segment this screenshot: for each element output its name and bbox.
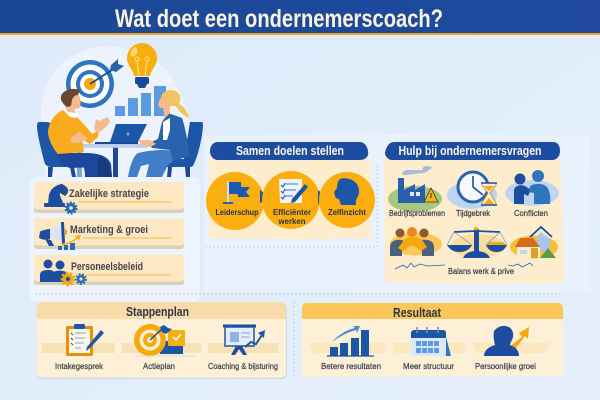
step: Actieplan <box>134 324 195 371</box>
man in yellow sweater <box>48 89 112 177</box>
illustration: coach meeting <box>37 43 203 177</box>
icon: people and gears <box>40 260 86 285</box>
goal: Efficiënter werken: werken <box>278 216 306 226</box>
icon: scales <box>447 227 507 258</box>
label: Bedrijfsproblemen <box>389 208 445 218</box>
step: Intakegesprek <box>55 324 104 371</box>
goal: Zelfinzicht <box>319 172 375 228</box>
result: Meer structuur <box>403 327 454 371</box>
panel: Samen doelen stellen <box>206 142 375 239</box>
heading: Resultaat <box>393 306 442 320</box>
decoration: squiggle lines <box>395 263 533 269</box>
title: Wat doet een ondernemerscoach? <box>115 5 443 33</box>
icon: conflict <box>505 170 559 206</box>
card: Personeelsbeleid <box>34 255 184 285</box>
icon: clock and hourglass <box>447 172 497 209</box>
header bar <box>0 0 600 35</box>
panel: expertise list <box>34 182 184 285</box>
heading pill <box>385 142 560 160</box>
heading pill: Hulp bij ondernemersvragen <box>398 144 542 158</box>
label: Conflicten <box>514 208 548 218</box>
chart: rising bars <box>115 86 166 116</box>
panel: Hulp bij ondernemersvragen <box>384 142 565 284</box>
heading pill: Samen doelen stellen <box>236 144 344 158</box>
woman in blue blazer <box>128 90 190 177</box>
heading: Stappenplan <box>126 305 189 319</box>
arrow <box>260 190 270 203</box>
step: Intakegesprek: Intakegesprek <box>55 361 104 371</box>
step: Actieplan: Actieplan <box>143 361 175 371</box>
goal: Leiderschap: Leiderschup <box>216 207 258 217</box>
table and laptop <box>72 124 148 177</box>
goal: Zelfinzicht: Zelfinzicht <box>328 207 366 217</box>
icon: home <box>510 227 558 258</box>
result: Betere resultaten: Betere resultaten <box>321 361 381 371</box>
card: Zakelijke strategie <box>34 182 184 214</box>
label: Tijdgebrek <box>456 208 491 218</box>
card: Marketing & groei <box>34 218 184 250</box>
result: Betere resultaten <box>321 326 381 371</box>
label: Marketing & groei <box>70 224 148 236</box>
step: Coaching & bijsturing <box>208 326 278 371</box>
chairs <box>37 122 203 177</box>
panel: Resultaat <box>302 303 563 377</box>
goal: Efficiënter werken: Efficiënter <box>273 207 312 217</box>
icon: target with arrow <box>66 59 124 108</box>
icon: megaphone and growth <box>39 222 81 250</box>
result: Persoonlijke groei: Persoonlijke groei <box>475 361 536 371</box>
goal: Leiderschap <box>206 172 264 230</box>
step: Coaching & bijsturing: Coaching & bijsturing <box>208 361 278 371</box>
icon: factory problems <box>388 166 442 212</box>
label: Zakelijke strategie <box>69 188 149 200</box>
label: Personeelsbeleid <box>71 261 143 273</box>
result: Meer structuur: Meer structuur <box>403 361 454 371</box>
label: Balans werk & prive <box>448 266 514 276</box>
icon: chess knight <box>44 184 76 214</box>
backdrop blob <box>41 46 193 177</box>
goal: Efficiënter werken <box>262 171 320 229</box>
heading pill <box>210 142 368 160</box>
icon: light bulb <box>127 43 157 88</box>
result: Persoonlijke groei <box>475 326 536 371</box>
icon: group support <box>390 227 442 256</box>
arrow <box>318 190 327 204</box>
panel: Stappenplan <box>37 302 287 379</box>
soft background panels <box>30 134 590 378</box>
